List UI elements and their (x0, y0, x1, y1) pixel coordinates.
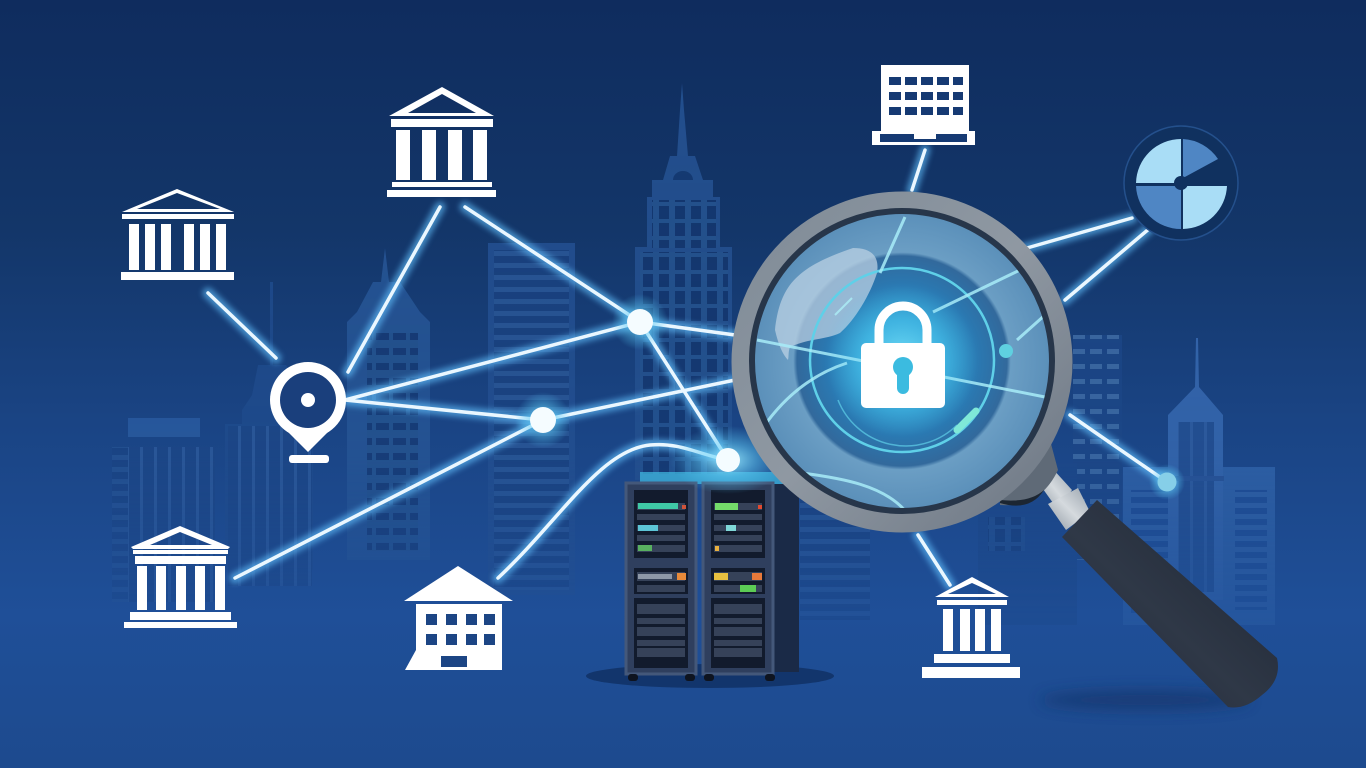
connection network lines (208, 150, 1167, 585)
radar rings (810, 268, 1013, 452)
icon: office block top (872, 65, 975, 145)
server glowing node (670, 426, 786, 494)
icon: office building (404, 566, 513, 670)
magnifying glass (742, 202, 1278, 710)
server rack (586, 472, 834, 688)
handle shadow (1040, 690, 1250, 710)
lens network lines (757, 217, 1050, 513)
lens (752, 211, 1052, 511)
ring (742, 202, 1062, 522)
icon: bank lower left (124, 526, 237, 628)
icon: bank lower right (922, 577, 1020, 678)
icon: location pin (270, 362, 346, 463)
padlock icon (861, 306, 945, 408)
server status lights (637, 503, 762, 657)
icon: pie chart (1124, 126, 1238, 240)
lens glow (824, 282, 980, 438)
network nodes (515, 294, 1185, 500)
handle (1000, 440, 1278, 708)
icon: bank top (387, 87, 496, 197)
skyline (112, 83, 1275, 625)
icon: bank left (121, 189, 234, 280)
lens highlight (775, 248, 878, 360)
